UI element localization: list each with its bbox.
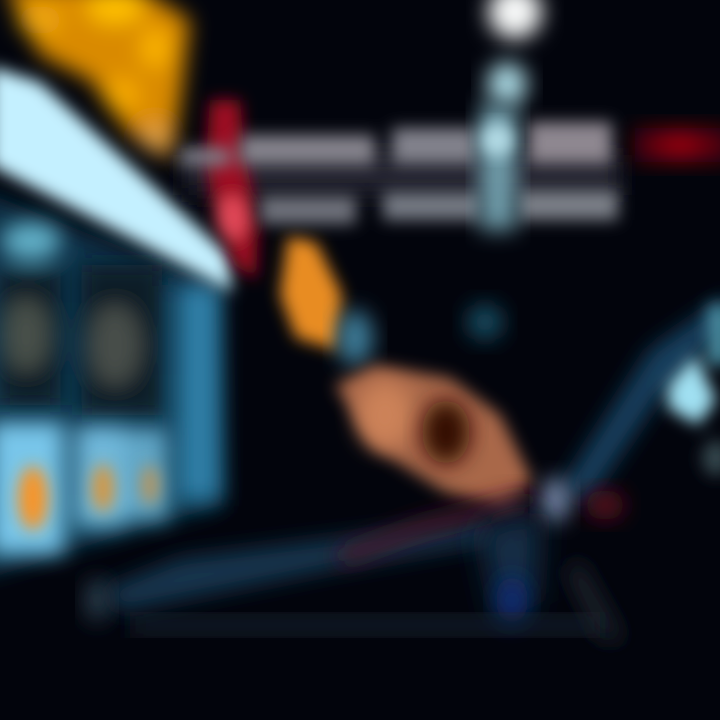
laptop text row [130, 618, 600, 632]
laptop side [565, 560, 625, 640]
icon: red accent [206, 100, 258, 280]
blue key highlight [480, 510, 540, 620]
building lower windows with flames [0, 422, 168, 554]
palm [335, 365, 532, 508]
connector [480, 105, 516, 230]
icon: small blue marker [337, 310, 373, 366]
building roof [0, 66, 232, 292]
hand [335, 365, 532, 508]
light dots column [467, 0, 542, 340]
laptop back edge [100, 520, 500, 612]
blue key [496, 576, 528, 624]
laptop [85, 498, 625, 640]
title haze [185, 155, 620, 195]
palm highlight [357, 381, 413, 449]
icon: yellow star cluster [5, 0, 190, 160]
red tip [585, 490, 625, 520]
title line two [260, 190, 618, 224]
icon: orange flame [280, 236, 342, 350]
bright node [480, 123, 514, 157]
red line [340, 498, 530, 558]
top white dot [488, 0, 542, 39]
icon: building [0, 66, 232, 575]
building walls [0, 190, 222, 575]
title [180, 122, 618, 224]
building dark windows [0, 222, 220, 500]
title line one [180, 122, 612, 166]
small teal dot [467, 304, 503, 340]
palm shadow [422, 400, 470, 464]
second dot [487, 62, 527, 106]
red accent bar [635, 128, 720, 162]
pen [541, 295, 720, 522]
pen tip [541, 478, 569, 522]
icon: light blue droplet [668, 305, 720, 476]
laptop left corner [85, 578, 109, 622]
